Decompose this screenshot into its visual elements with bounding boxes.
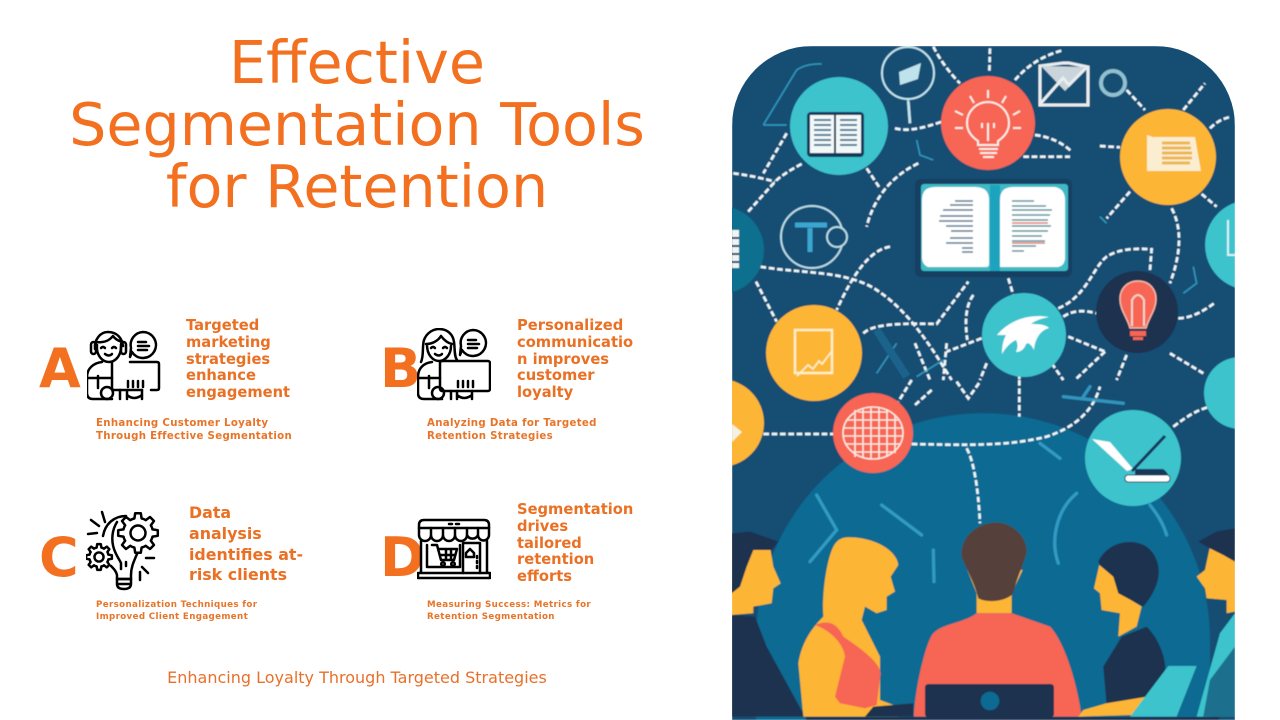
lead text C <box>189 503 303 584</box>
letter A: A <box>39 337 81 400</box>
caption A <box>96 418 292 442</box>
circle: left yellow edge <box>732 380 765 466</box>
circle: teal leaf <box>982 293 1066 377</box>
circle: coral lightbulb <box>941 76 1035 170</box>
icon: envelope <box>1040 63 1088 105</box>
lead text A: marketing <box>186 334 271 351</box>
circle: teal book <box>790 77 888 175</box>
title <box>69 29 645 221</box>
person: woman with dark hair <box>1078 542 1197 717</box>
lead text A: engagement <box>186 384 290 401</box>
panel: item A <box>39 317 292 442</box>
lead text B: communicatio <box>517 334 633 351</box>
circle: right teal edge, lower <box>1204 357 1235 429</box>
lead text B: n improves <box>517 351 609 368</box>
icon: woman at monitor with speech bubble <box>417 328 491 400</box>
lead text D: retention <box>517 551 594 568</box>
lead text B <box>517 317 633 401</box>
person: man at left <box>732 532 805 717</box>
lead text D: drives <box>517 518 568 535</box>
caption A: Enhancing Customer Loyalty <box>96 418 268 429</box>
lead text A: enhance <box>186 367 256 384</box>
caption C: Personalization Techniques for <box>96 600 257 610</box>
circle: yellow chart <box>766 305 862 401</box>
lead text A: strategies <box>186 351 270 368</box>
caption C: Improved Client Engagement <box>96 612 248 622</box>
lead text D: Segmentation <box>517 501 633 518</box>
caption B <box>427 418 597 442</box>
lead text B: Personalized <box>517 317 623 334</box>
circle: yellow book <box>1120 109 1216 205</box>
network lines, upper <box>733 47 1232 380</box>
panel: item D <box>380 501 633 622</box>
lead text D: tailored <box>517 535 582 552</box>
circle: right teal edge, tablet <box>1205 203 1235 287</box>
icon: outline music note circle <box>882 47 934 123</box>
circle: coral globe <box>833 393 913 473</box>
lead text A <box>186 317 290 401</box>
icon: storefront with shopping cart <box>417 518 491 580</box>
circle: left teal edge, document <box>732 207 764 293</box>
network lines, lower <box>763 380 1210 523</box>
lead text C: identifies at- <box>189 545 303 564</box>
icon: support agent at monitor <box>87 330 160 400</box>
illustration: people surrounded by a network of knowledge icons <box>732 46 1235 720</box>
center open book <box>915 179 1072 277</box>
lead text C: Data <box>189 503 231 522</box>
panel: item B <box>380 317 633 442</box>
lead text A: Targeted <box>186 317 259 334</box>
lead text B: loyalty <box>517 384 573 401</box>
caption A: Through Effective Segmentation <box>96 431 292 442</box>
lead text C: risk clients <box>189 565 287 584</box>
caption B: Retention Strategies <box>427 431 553 442</box>
letter C: C <box>39 526 79 589</box>
lead text D <box>517 501 633 585</box>
panel: item C <box>39 503 303 622</box>
lead text D: efforts <box>517 568 572 585</box>
circle: navy lightbulb <box>1096 271 1178 353</box>
letter B: B <box>380 337 421 400</box>
footer tagline: Enhancing Loyalty Through Targeted Strategies <box>167 668 547 687</box>
faint background doodles <box>810 387 1167 582</box>
person: man seen from behind with laptop <box>914 522 1082 717</box>
icon: small ring <box>1101 71 1125 95</box>
caption D: Measuring Success: Metrics for <box>427 600 591 610</box>
icon: headset outline <box>781 206 847 268</box>
lead text B: customer <box>517 367 595 384</box>
title: Segmentation Tools <box>69 91 645 159</box>
title: Effective <box>229 29 485 97</box>
icon: lightbulb with gears <box>86 510 160 590</box>
caption D: Retention Segmentation <box>427 612 555 622</box>
caption C <box>96 600 257 622</box>
person: woman with yellow hair <box>798 537 913 717</box>
image base line <box>806 717 1219 720</box>
letter D: D <box>380 526 425 589</box>
person: man at right <box>1197 528 1235 717</box>
lead text C: analysis <box>189 524 262 543</box>
title: for Retention <box>166 153 548 221</box>
caption B: Analyzing Data for Targeted <box>427 418 597 429</box>
caption D <box>427 600 591 622</box>
circle: teal pen and laptop <box>1085 410 1181 506</box>
